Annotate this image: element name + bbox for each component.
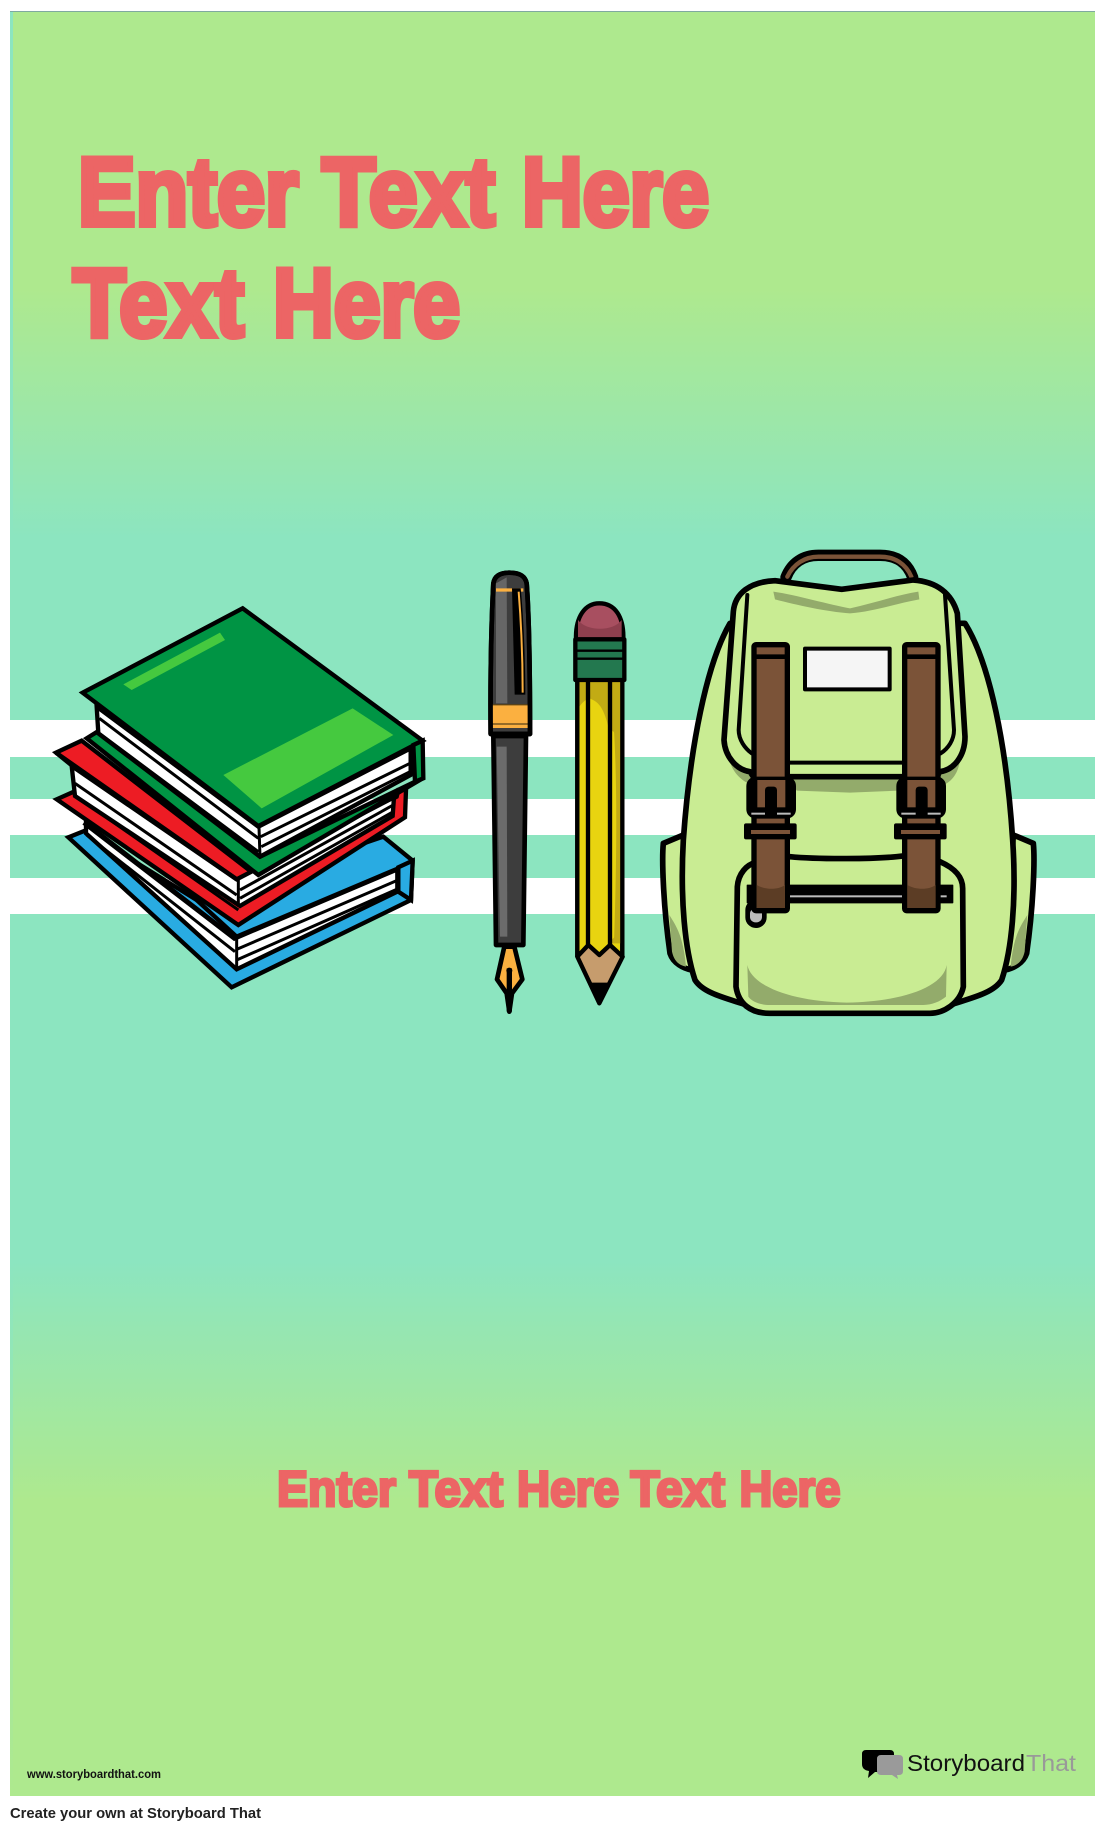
eraser — [576, 603, 623, 639]
ferrule — [575, 639, 624, 680]
zipper — [746, 885, 953, 927]
clip — [496, 585, 523, 595]
subtitle: Text — [409, 1460, 503, 1517]
green book — [83, 608, 423, 875]
side pockets — [663, 835, 1034, 970]
flap shading — [773, 592, 919, 613]
gold band — [492, 704, 528, 728]
website url: www.storyboardthat.com — [26, 1767, 161, 1781]
icon: fountain pen — [491, 573, 530, 1012]
name label — [805, 649, 890, 689]
front pocket — [736, 856, 963, 1013]
icon: pencil — [575, 603, 624, 1003]
nib — [497, 947, 522, 1012]
logo: Storyboard That: That — [1026, 1750, 1077, 1776]
left strap and buckle — [745, 645, 796, 911]
white horizontal stripes — [10, 720, 1095, 914]
subtitle — [277, 1460, 840, 1517]
title: Text — [73, 248, 244, 357]
cap — [491, 573, 530, 734]
subtitle: Here — [517, 1460, 619, 1517]
blue book — [68, 823, 413, 987]
pencil tip — [577, 945, 623, 1003]
icon: backpack — [663, 555, 1034, 1013]
icon: stack of books — [56, 608, 423, 987]
main body — [682, 623, 1014, 1005]
subtitle: Text — [630, 1460, 725, 1517]
title: Enter — [78, 137, 298, 246]
logo: Storyboard That — [862, 1750, 1077, 1779]
subtitle: Enter — [277, 1460, 396, 1517]
title — [73, 137, 709, 357]
barrel — [493, 736, 526, 945]
logo: Storyboard That: Storyboard — [907, 1750, 1025, 1776]
red book — [56, 741, 406, 925]
flap shadow — [729, 760, 960, 785]
top flap — [724, 580, 965, 777]
pencil body — [577, 679, 622, 956]
title: Here — [273, 248, 460, 357]
text: Here — [740, 1460, 841, 1517]
text: Here — [522, 137, 709, 246]
footer caption: Create your own at Storyboard That — [10, 1805, 261, 1822]
title: Text — [322, 137, 495, 246]
right strap and buckle — [895, 645, 946, 911]
handle — [786, 555, 913, 577]
